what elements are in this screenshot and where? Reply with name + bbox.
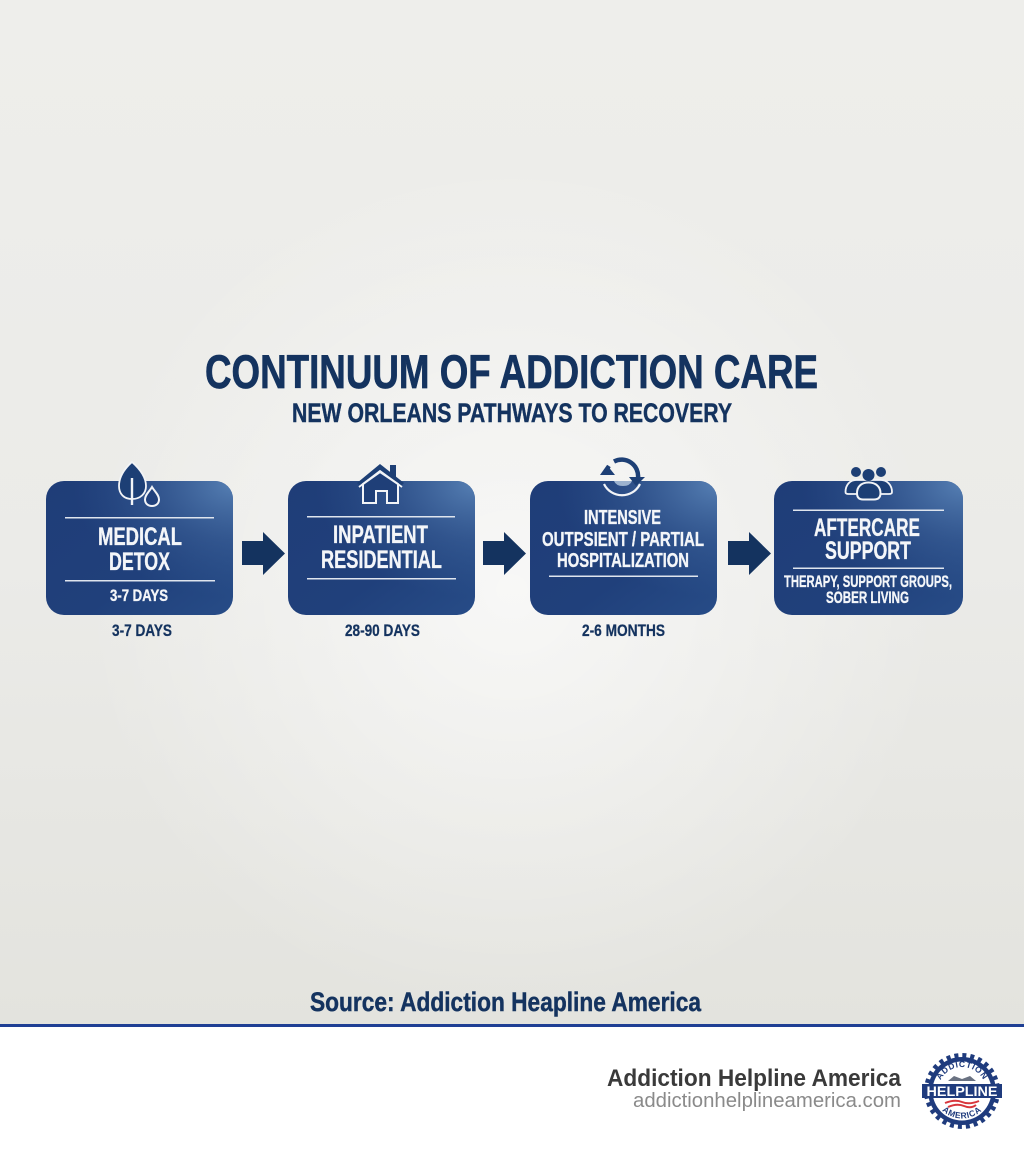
arrow: outpatient to aftercare: [728, 532, 771, 575]
badge banner text: HELPLINE: [926, 1084, 998, 1099]
footer band: [0, 1024, 1024, 1154]
label: medical detox duration: 3-7 DAYS: [112, 622, 172, 640]
heading: residential: RESIDENTIAL: [321, 546, 442, 574]
label: inpatient duration: 28-90 DAYS: [345, 622, 420, 640]
heading: inpatient: INPATIENT: [333, 521, 428, 549]
title: CONTINUUM OF ADDICTION CARE: [205, 345, 818, 398]
text: sober living: SOBER LIVING: [826, 589, 909, 607]
heading: medical detox: MEDICAL: [98, 523, 182, 551]
heading: detox: DETOX: [109, 548, 170, 576]
icon: group of people: [846, 467, 892, 500]
icon: leaf and water drop: [119, 462, 159, 506]
panel: aftercare support: [774, 481, 963, 615]
heading: aftercare: AFTERCARE: [814, 514, 920, 542]
brand url: addictionhelplineamerica.com: [633, 1090, 901, 1112]
panel: intensive outpatient: [530, 481, 717, 615]
arrow: inpatient to outpatient: [483, 532, 526, 575]
panel: medical detox: [46, 481, 233, 615]
heading: hospitalization: HOSPITALIZATION: [557, 550, 689, 572]
heading: support: SUPPORT: [825, 537, 911, 565]
label: outpatient duration: 2-6 MONTHS: [582, 622, 665, 640]
brand name: Addiction Helpline America: [607, 1065, 902, 1092]
badge ring text: america: AMERICA: [942, 1107, 982, 1119]
duration inside card: 3-7 DAYS: [110, 587, 168, 605]
source line: Source: Addiction Heapline America: [310, 987, 701, 1017]
badge banner: [922, 1084, 1002, 1098]
icon: helpline badge: [922, 1053, 1002, 1129]
panel: inpatient residential: [288, 481, 475, 615]
text: therapy support groups: THERAPY, SUPPORT GROUPS,: [784, 573, 952, 591]
heading: intensive: INTENSIVE: [584, 507, 661, 529]
arrow: detox to inpatient: [242, 532, 285, 575]
icon: cycle arrows: [600, 460, 645, 495]
badge ring text: addiction: ADDICTION: [937, 1062, 988, 1080]
heading: outpatient partial: OUTPSIENT / PARTIAL: [542, 529, 704, 551]
icon: house: [357, 464, 404, 503]
subtitle: NEW ORLEANS PATHWAYS TO RECOVERY: [292, 398, 732, 428]
